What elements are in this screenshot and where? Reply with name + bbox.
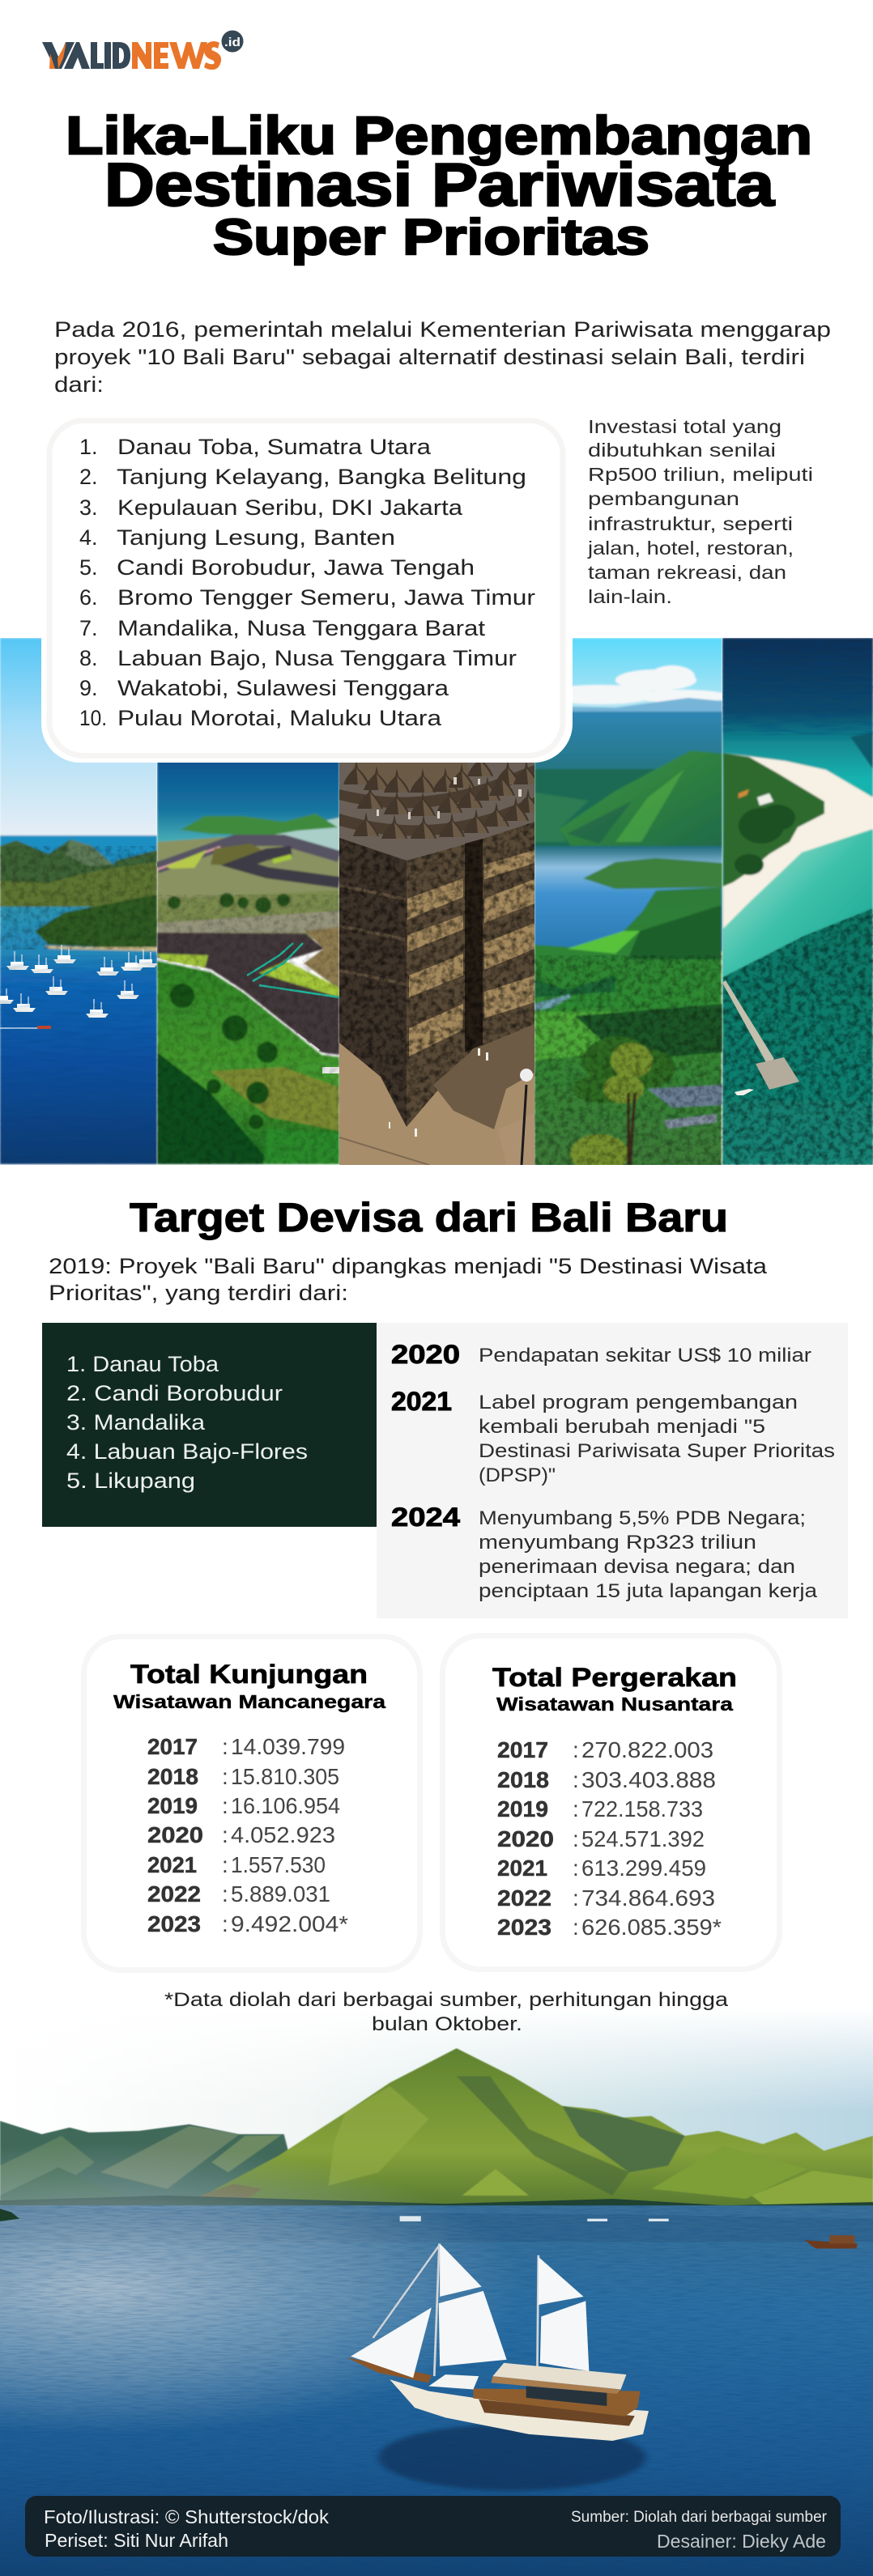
list of ten destinations: Wakatobi, Sulawesi Tenggara (117, 676, 449, 700)
logo wordmark orange (132, 41, 221, 70)
card 1 figures: : (222, 1852, 228, 1877)
card 1 title: Total Kunjungan (130, 1660, 368, 1689)
credits right: Sumber: Diolah dari berbagai sumber (571, 2509, 828, 2526)
panel: five priority destinations: 1. Danau Toba (66, 1352, 219, 1376)
card 1 figures: 2022 (147, 1881, 201, 1906)
side note: total investment: jalan, hotel, restoran, (587, 538, 794, 559)
card 2 figures: 2018 (497, 1767, 549, 1792)
panel: five priority destinations: 4. Labuan Bajo-Flores (66, 1439, 308, 1464)
side note: total investment: pembangunan (588, 488, 739, 509)
card 2 title (492, 1663, 737, 1715)
card 2 figures: : (573, 1885, 579, 1911)
temple dome and terrace walls (339, 763, 534, 839)
side note: total investment: infrastruktur, seperti (588, 513, 793, 534)
list of ten destinations: Tanjung Kelayang, Bangka Belitung (117, 465, 526, 489)
credits right: Desainer: Dieky Ade (657, 2531, 826, 2552)
logo .id badge: .id (224, 36, 241, 49)
timeline 2020: Pendapatan sekitar US$ 10 miliar (479, 1345, 811, 1367)
sails (351, 2243, 589, 2378)
card 2 figures: : (573, 1796, 579, 1821)
timeline 2021: kembali berubah menjadi "5 (479, 1416, 765, 1438)
list of ten destinations: Labuan Bajo, Nusa Tenggara Timur (117, 646, 517, 670)
list of ten destinations: Candi Borobudur, Jawa Tengah (117, 555, 475, 580)
credits left: Foto/Ilustrasi: © Shutterstock/dok (44, 2506, 330, 2527)
list of ten destinations: Danau Toba, Sumatra Utara (117, 435, 432, 459)
card 1 figures: : (222, 1881, 228, 1906)
hull (390, 2379, 649, 2441)
list of ten destinations: Mandalika, Nusa Tenggara Barat (117, 616, 486, 640)
rigging and masts (373, 2243, 539, 2376)
timeline 2021: Destinasi Pariwisata Super Prioritas (479, 1440, 835, 1462)
sky fade to white (0, 1974, 873, 2111)
card 2 figures: 303.403.888 (581, 1767, 716, 1792)
card body (41, 409, 573, 763)
footnote (164, 1989, 729, 2035)
card 1 figures: : (222, 1764, 228, 1789)
list of ten destinations: 8. (79, 646, 98, 670)
list of ten destinations: 5. (79, 555, 98, 580)
timeline 2020 (391, 1340, 811, 1369)
card 1 figures: : (222, 1793, 228, 1818)
card 2 figures: : (573, 1737, 579, 1762)
water glare (0, 2142, 523, 2434)
card 1 figures: 4.052.923 (231, 1822, 335, 1847)
list of ten destinations: 9. (79, 676, 98, 700)
card 1 figures: 2017 (147, 1734, 198, 1759)
logo: Validnews.id (42, 31, 243, 70)
panel: foreign visitors total (84, 1637, 419, 1970)
decks (479, 2400, 635, 2426)
timeline 2024: Menyumbang 5,5% PDB Negara; (479, 1507, 806, 1529)
card 2 figures: : (573, 1767, 579, 1792)
card 1 figures: 2023 (147, 1911, 201, 1936)
card 1 title: Wisatawan Mancanegara (113, 1691, 385, 1712)
list of ten destinations: Pulau Morotai, Maluku Utara (117, 706, 442, 730)
intro paragraph: proyek "10 Bali Baru" sebagai alternatif destinasi selain Bali, terdiri (54, 345, 805, 369)
title: Destinasi Pariwisata (104, 151, 775, 219)
card 1 figures: 1.557.530 (231, 1852, 326, 1877)
card 2 figures: 2020 (497, 1826, 554, 1851)
intro paragraph (54, 317, 831, 397)
side note: total investment: lain-lain. (588, 586, 672, 607)
footnote: *Data diolah dari berbagai sumber, perhitungan hingga (164, 1989, 729, 2011)
footnote: bulan Oktober. (372, 2013, 522, 2035)
water (0, 2205, 873, 2576)
phinisi ship (347, 2243, 649, 2441)
credits left (44, 2506, 330, 2551)
list of ten destinations: 1. (79, 435, 98, 459)
card 2 figures (497, 1737, 722, 1940)
list of ten destinations: 3. (79, 495, 98, 520)
logo wordmark dark (42, 42, 130, 69)
title: Super Prioritas (213, 210, 649, 266)
timeline 2024: penerimaan devisa negara; dan (479, 1556, 795, 1578)
card 2 figures: 722.158.733 (581, 1796, 703, 1821)
list of ten destinations: 7. (79, 616, 98, 640)
list of ten destinations: 4. (79, 525, 98, 550)
card 2 figures: 2019 (497, 1796, 548, 1821)
card inner ring (49, 421, 563, 756)
timeline 2021 (391, 1387, 835, 1486)
sky (0, 1975, 873, 2218)
card 2 figures: 270.822.003 (581, 1737, 713, 1762)
photo: Labuan Bajo bay with phinisi ship (0, 1974, 873, 2576)
photo: Mandalika circuit (157, 761, 339, 1164)
card 1 title (113, 1660, 385, 1712)
timeline 2021: 2021 (391, 1387, 452, 1416)
panel: five priority destinations: 2. Candi Borobudur (66, 1381, 283, 1405)
intro paragraph: dari: (54, 372, 104, 397)
photo strip: five destinations (0, 638, 873, 1173)
side note: total investment: dibutuhkan senilai (588, 440, 776, 461)
card 2 title: Total Pergerakan (492, 1663, 737, 1692)
heading: Target Devisa dari Bali Baru: Target Devisa dari Bali Baru (130, 1195, 728, 1240)
photo: Labuan Bajo harbour (0, 638, 158, 1164)
side note: total investment: Rp500 triliun, meliputi (588, 464, 813, 485)
card 2 figures: 2021 (497, 1855, 547, 1881)
distant boats and islet (0, 2208, 858, 2249)
timeline 2024: 2024 (391, 1503, 460, 1532)
card 2 figures: : (573, 1826, 579, 1851)
paragraph: 2019 program change: 2019: Proyek "Bali Baru" dipangkas menjadi "5 Destinasi Wisata (49, 1254, 768, 1278)
panel: white list card (41, 409, 573, 763)
side note: total investment: Investasi total yang (588, 416, 781, 437)
title (66, 105, 812, 266)
timeline 2020: 2020 (391, 1340, 460, 1369)
list of ten destinations: 10. (79, 706, 107, 730)
card 2 figures: 613.299.459 (581, 1855, 706, 1881)
card 1 figures: 5.889.031 (231, 1881, 330, 1906)
temple tower walls (339, 822, 534, 1127)
logo V accent (49, 42, 66, 69)
timeline 2024 (391, 1503, 818, 1602)
card 1 figures (147, 1734, 348, 1936)
card 1 figures: : (222, 1911, 228, 1936)
main mountain (201, 2048, 873, 2219)
panel: timeline of targets (377, 1323, 848, 1618)
card 1 figures: 9.492.004* (231, 1911, 348, 1936)
timeline 2021: Label program pengembangan (479, 1392, 798, 1413)
card 1 figures: 15.810.305 (231, 1764, 339, 1789)
card 2 figures: 2022 (497, 1885, 551, 1911)
footer credits bar (25, 2496, 841, 2557)
card 1 figures: 2018 (147, 1764, 198, 1789)
intro paragraph: Pada 2016, pemerintah melalui Kementerian Pariwisata menggarap (54, 317, 831, 342)
list of ten destinations: Kepulauan Seribu, DKI Jakarta (117, 495, 463, 520)
card 2 frame (442, 1635, 779, 1969)
list of ten destinations: Bromo Tengger Semeru, Jawa Timur (117, 585, 535, 610)
bowsprit (347, 2357, 432, 2383)
credits left: Periset: Siti Nur Arifah (45, 2530, 228, 2551)
panel: domestic tourists total (442, 1635, 779, 1969)
timeline 2024: menyumbang Rp323 triliun (479, 1532, 756, 1554)
list of ten destinations: 6. (79, 585, 98, 610)
list of ten destinations: Tanjung Lesung, Banten (117, 525, 395, 550)
timeline 2024: penciptaan 15 juta lapangan kerja (479, 1580, 818, 1602)
side note: total investment: taman rekreasi, dan (588, 562, 786, 583)
card 2 figures: : (573, 1855, 579, 1881)
logo .id badge (222, 31, 243, 52)
card 1 frame (84, 1637, 419, 1970)
title: Lika-Liku Pengembangan (66, 105, 812, 165)
card 2 figures: 734.864.693 (581, 1885, 715, 1911)
card 2 figures: : (573, 1915, 579, 1940)
panel: five priority destinations: 3. Mandalika (66, 1410, 206, 1435)
card 1 figures: : (222, 1734, 228, 1759)
side note: total investment (587, 416, 813, 607)
list of ten destinations: 2. (79, 465, 98, 489)
panel: five priority destinations (42, 1323, 377, 1527)
card 2 figures: 2017 (497, 1737, 548, 1762)
card 1 figures: : (222, 1822, 228, 1847)
card 1 figures: 16.106.954 (231, 1793, 340, 1818)
panel: five priority destinations: 5. Likupang (66, 1469, 195, 1493)
photo: Danau Toba (534, 638, 729, 1173)
card 1 figures: 2020 (147, 1822, 203, 1847)
tree line (0, 2196, 873, 2219)
card 2 figures: 626.085.359* (581, 1915, 722, 1940)
card 2 title: Wisatawan Nusantara (496, 1694, 733, 1715)
temple plaza (339, 1043, 534, 1165)
photo: Pulau Morotai beach (722, 638, 873, 1166)
timeline 2021: (DPSP)" (479, 1464, 556, 1486)
ship shadow (379, 2425, 646, 2490)
list of ten destinations (79, 435, 535, 730)
credits right (571, 2509, 828, 2552)
left hills (0, 2121, 290, 2205)
paragraph: 2019 program change (49, 1254, 768, 1305)
paragraph: 2019 program change: Prioritas", yang terdiri dari: (49, 1281, 348, 1305)
card 1 figures: 14.039.799 (231, 1734, 345, 1759)
photo: Candi Borobudur (339, 750, 541, 1166)
card 2 figures: 524.571.392 (581, 1826, 705, 1851)
card 2 figures: 2023 (497, 1915, 551, 1940)
card 1 figures: 2019 (147, 1793, 198, 1818)
card 1 figures: 2021 (147, 1852, 197, 1877)
